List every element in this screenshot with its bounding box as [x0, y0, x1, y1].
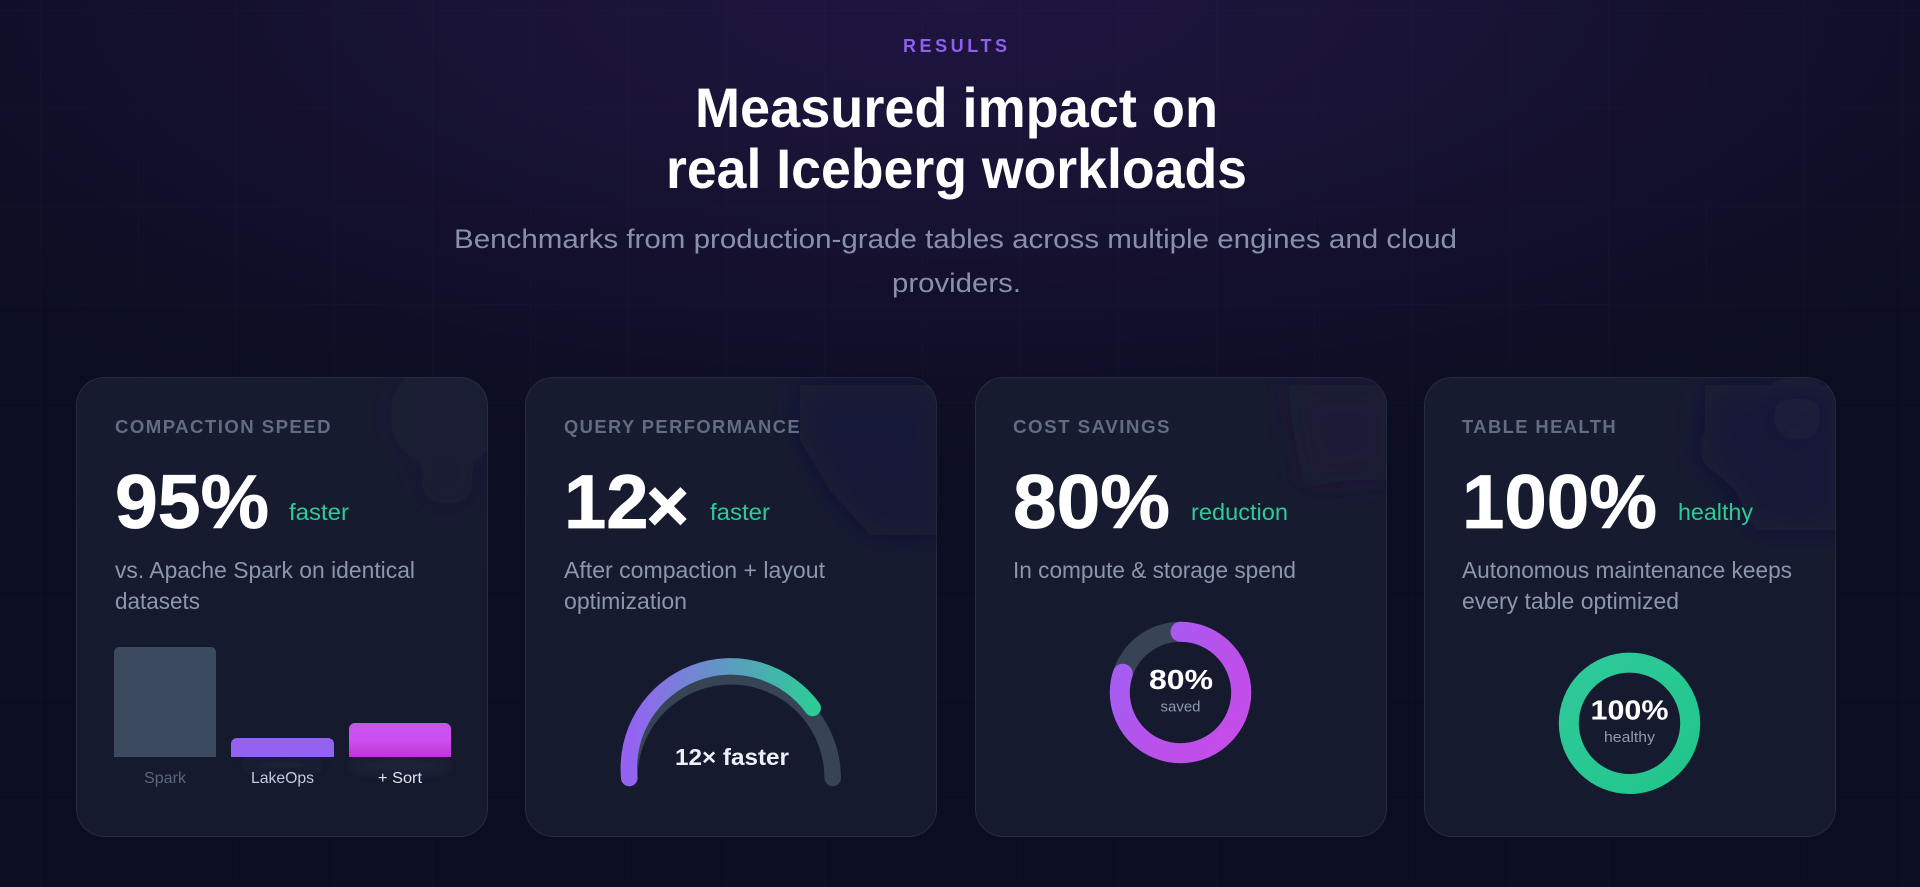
panel: table health: [1424, 378, 1845, 836]
stat: 80%: 80%: [1013, 460, 1170, 545]
subtitle: providers.: [892, 268, 1021, 298]
gauge label: 12× faster: [675, 744, 789, 770]
donut chart: [1569, 663, 1690, 784]
bar: lakeops: [231, 738, 334, 757]
description: optimization: [564, 588, 687, 614]
stat: 12x: 12: [564, 460, 649, 545]
description: datasets: [115, 588, 200, 614]
panel: compaction speed: [76, 360, 500, 836]
title: [666, 76, 1247, 200]
header: [454, 36, 1457, 298]
label: COST SAVINGS: [1013, 417, 1171, 437]
stat: 12x: ×: [646, 464, 689, 547]
card background: [1424, 378, 1845, 836]
subtitle: [454, 224, 1457, 298]
description: [564, 557, 826, 614]
card background: [526, 378, 945, 836]
bar: sort: [349, 723, 451, 757]
unit: faster: faster: [289, 499, 349, 525]
panel: query performance: [526, 378, 945, 836]
eyebrow: results: RESULTS: [903, 36, 1007, 56]
gauge chart: [629, 666, 833, 778]
subtitle: Benchmarks from production-grade tables across multiple engines and cloud: [454, 224, 1457, 254]
donut ring: [1569, 663, 1690, 784]
title: real Iceberg workloads: [666, 137, 1247, 200]
label: COMPACTION SPEED: [115, 417, 332, 437]
bar label: lakeops: LakeOps: [251, 770, 314, 787]
donut value: 100%: [1590, 694, 1668, 726]
stat: 95%: 95%: [115, 460, 269, 545]
unit: healthy: healthy: [1678, 499, 1753, 525]
card background: [976, 378, 1395, 836]
card background: [76, 360, 500, 836]
donut value: 80%: [1149, 664, 1213, 695]
description: Autonomous maintenance keeps: [1462, 557, 1792, 583]
donut caption: saved: [1160, 698, 1200, 716]
description: In compute & storage spend: [1013, 557, 1296, 583]
donut value arc: [1120, 632, 1241, 753]
bar chart: [114, 647, 452, 787]
description: vs. Apache Spark on identical: [115, 557, 415, 583]
donut track: [1120, 632, 1241, 753]
description: every table optimized: [1462, 588, 1679, 614]
panel: cost savings: [976, 378, 1395, 836]
stat: 100%: 100%: [1462, 460, 1657, 545]
bar label: sort: + Sort: [378, 770, 423, 787]
donut chart: [1120, 632, 1241, 753]
gauge value arc: [629, 666, 813, 778]
description: After compaction + layout: [564, 557, 826, 583]
bar label: spark: Spark: [144, 770, 187, 787]
description: [115, 557, 415, 614]
label: TABLE HEALTH: [1462, 417, 1617, 437]
donut caption: healthy: [1604, 729, 1656, 746]
gauge track: [629, 676, 833, 778]
label: QUERY PERFORMANCE: [564, 417, 801, 437]
bar: spark: [114, 647, 216, 757]
title: Measured impact on: [695, 76, 1218, 139]
unit: faster: faster: [710, 499, 770, 525]
description: [1462, 557, 1792, 614]
unit: reduction: reduction: [1191, 499, 1288, 525]
